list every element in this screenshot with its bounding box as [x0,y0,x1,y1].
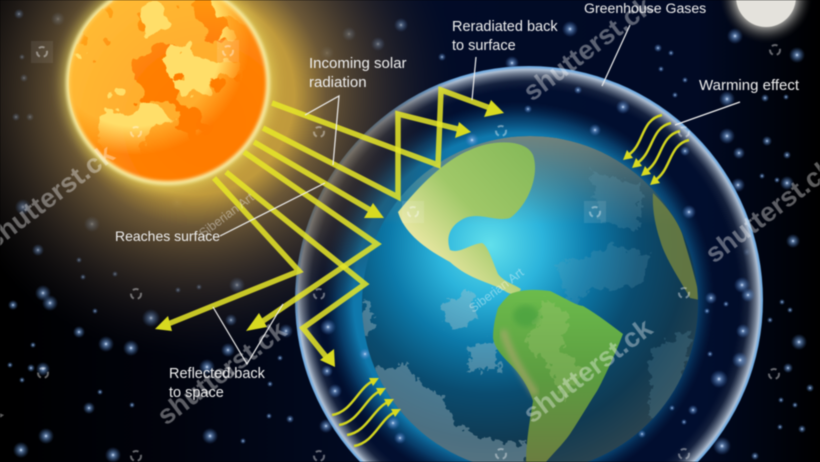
label: reflected back to space: to space [169,385,224,401]
stars inside atmosphere [319,86,755,455]
label: reradiated back to surface: to surface [452,38,516,54]
ray: reradiated outer [272,90,504,165]
leader lines [213,25,740,364]
moon [720,0,812,43]
label: reflected back to space: Reflected back [169,366,266,382]
atmosphere [295,66,763,462]
incoming solar radiation rays [155,90,504,367]
watermarks: shutterst.ck [152,314,293,431]
clouds [350,290,530,462]
earth [350,136,700,462]
label: incoming solar radiation: Incoming solar [309,55,407,72]
label: greenhouse gases: Greenhouse Gases [584,0,706,16]
sun [60,0,280,190]
ray: reflected into atmosphere [226,172,365,367]
land: north and central america [398,142,535,294]
lower wavy arrows [332,378,401,446]
land: south america [493,290,623,462]
warming effect wavy arrows [623,115,689,185]
watermarks: Siberian Art [196,190,257,240]
ray: reradiated inner [263,114,471,197]
watermarks: Siberian Art [466,265,527,315]
sun glow [0,0,470,370]
watermarks: shutterst.ck [518,312,659,429]
label: warming effect: Warming effect [699,77,800,94]
ray: reaches surface [254,142,384,218]
land: africa [653,193,700,300]
label: reaches surface: Reaches surface [115,228,220,244]
ray: reflected to space 1 [244,152,377,331]
label: reradiated back to surface: Reradiated back [452,19,558,35]
label: incoming solar radiation: radiation [309,74,367,91]
ray: reflected to space 2 [155,178,299,331]
